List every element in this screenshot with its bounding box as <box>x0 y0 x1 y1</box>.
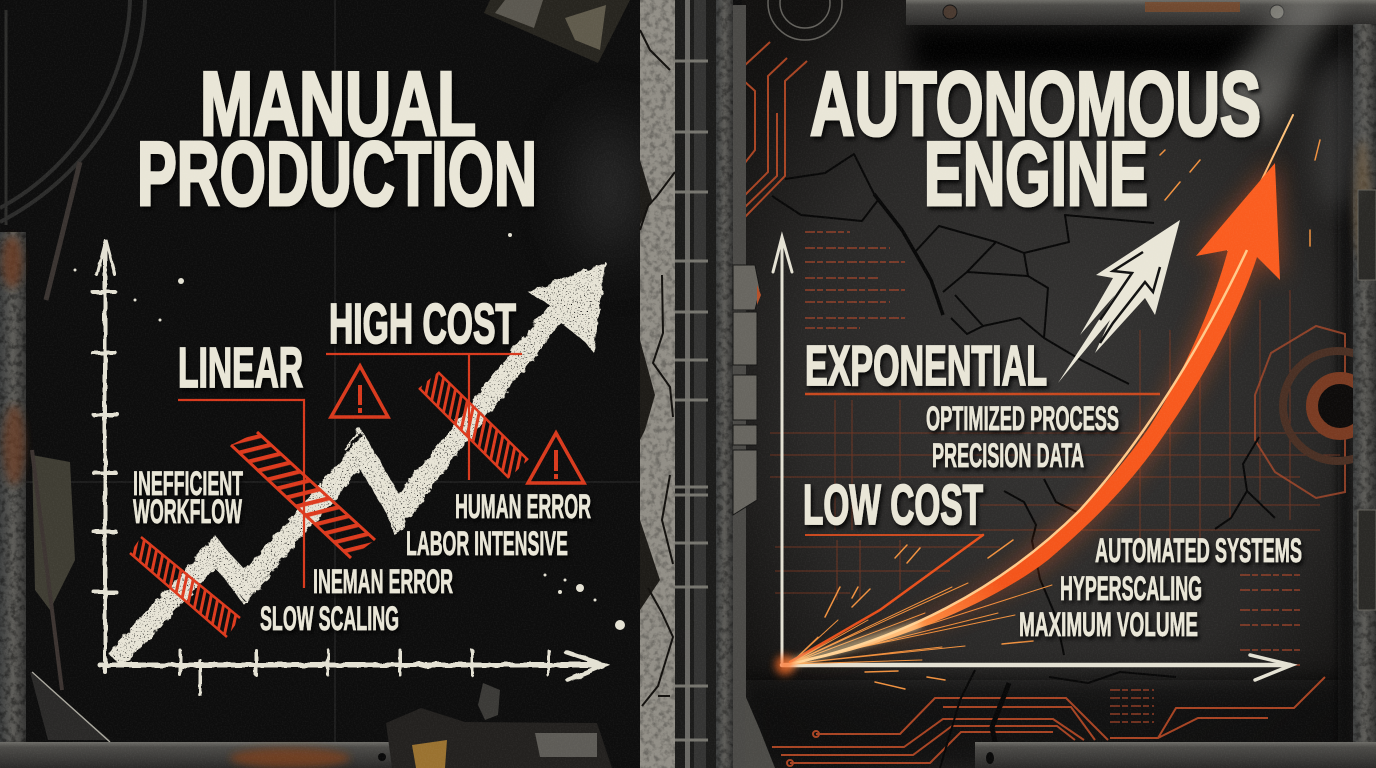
labels: right chart: PRECISION DATA <box>932 437 1084 475</box>
hatched bands <box>130 372 528 637</box>
concrete cracks <box>772 154 1275 768</box>
icon: metal box top <box>484 0 630 63</box>
labels: right chart: LOW COST <box>803 473 983 537</box>
labels: left chart: INEFFICIENT <box>133 465 243 503</box>
panel: rebar channel <box>675 0 717 768</box>
panel: metal strips <box>716 0 775 768</box>
title: manual production <box>137 54 537 225</box>
labels: left chart: HIGH COST <box>329 292 516 356</box>
labels: left chart: LINEAR <box>178 336 303 400</box>
sparks <box>790 115 1320 689</box>
labels: right chart <box>803 334 1302 644</box>
panel: right top metal bar <box>906 0 1376 25</box>
grid lines <box>770 290 1350 600</box>
icon: gear <box>1255 326 1376 498</box>
circuit traces <box>744 42 1325 766</box>
red underlines: right <box>805 394 1160 535</box>
panel: bottom left metal bar <box>0 742 400 768</box>
panel: right metal frame <box>1353 24 1376 768</box>
paint splatter <box>74 233 625 630</box>
chart axes: right <box>773 237 1292 680</box>
chart axes: left <box>93 240 604 695</box>
panel: right background <box>742 0 1376 768</box>
panel: left background <box>0 0 642 768</box>
panel: concrete divider <box>640 0 676 768</box>
labels: left chart <box>133 292 591 638</box>
labels: right chart: HYPERSCALING <box>1060 570 1202 608</box>
labels: left chart: WORKFLOW <box>133 493 242 531</box>
panel: bottom right metal bar <box>975 742 1376 768</box>
labels: right chart: OPTIMIZED PROCESS <box>926 400 1119 438</box>
icon: warning triangles <box>331 366 584 483</box>
labels: left chart: INEMAN ERROR <box>313 563 453 601</box>
panel: left metal frame <box>0 232 110 768</box>
title: manual production: PRODUCTION <box>137 124 537 225</box>
zigzag arrow <box>115 262 606 660</box>
labels: left chart: LABOR INTENSIVE <box>406 525 568 563</box>
smoke <box>1200 0 1360 210</box>
icon: gear top <box>768 0 842 40</box>
labels: left chart: SLOW SCALING <box>260 600 399 638</box>
labels: left chart: HUMAN ERROR <box>455 488 591 526</box>
title: manual production: MANUAL <box>200 54 476 155</box>
exponential curve arrow <box>775 163 1280 675</box>
small data text blocks <box>805 232 1302 722</box>
icon: white spark arrow <box>1058 220 1180 383</box>
red annotation lines <box>178 354 522 588</box>
title: autonomous engine <box>810 54 1261 225</box>
labels: right chart: EXPONENTIAL <box>805 334 1047 398</box>
title: autonomous engine: ENGINE <box>924 124 1148 225</box>
labels: right chart: MAXIMUM VOLUME <box>1019 606 1198 644</box>
debris <box>386 683 612 768</box>
